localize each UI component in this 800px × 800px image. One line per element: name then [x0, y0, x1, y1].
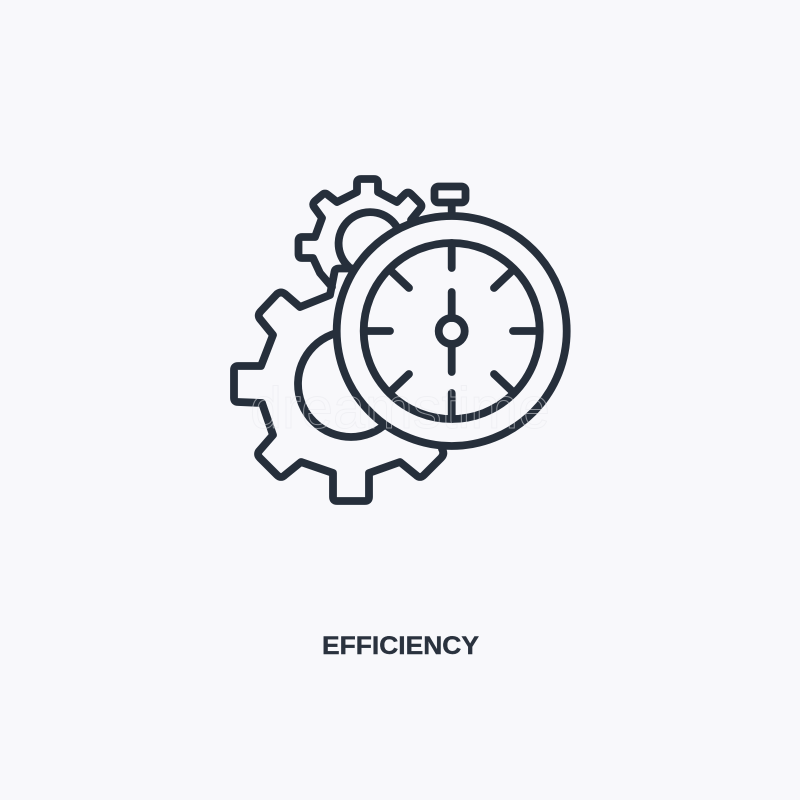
- stopwatch dial: [364, 243, 540, 419]
- title: EFFICIENCY: [322, 632, 479, 660]
- stopwatch outer case: [337, 216, 567, 446]
- icon: efficiency gears and stopwatch: [234, 179, 567, 501]
- icon: large gear: [234, 268, 443, 501]
- watermark: dreamstime: [250, 376, 550, 441]
- icon: small gear: [298, 179, 422, 287]
- icon: stopwatch: [337, 186, 567, 446]
- stopwatch crown: [434, 186, 466, 216]
- stopwatch tick marks: [364, 243, 539, 419]
- stopwatch hands and hub: [439, 292, 465, 372]
